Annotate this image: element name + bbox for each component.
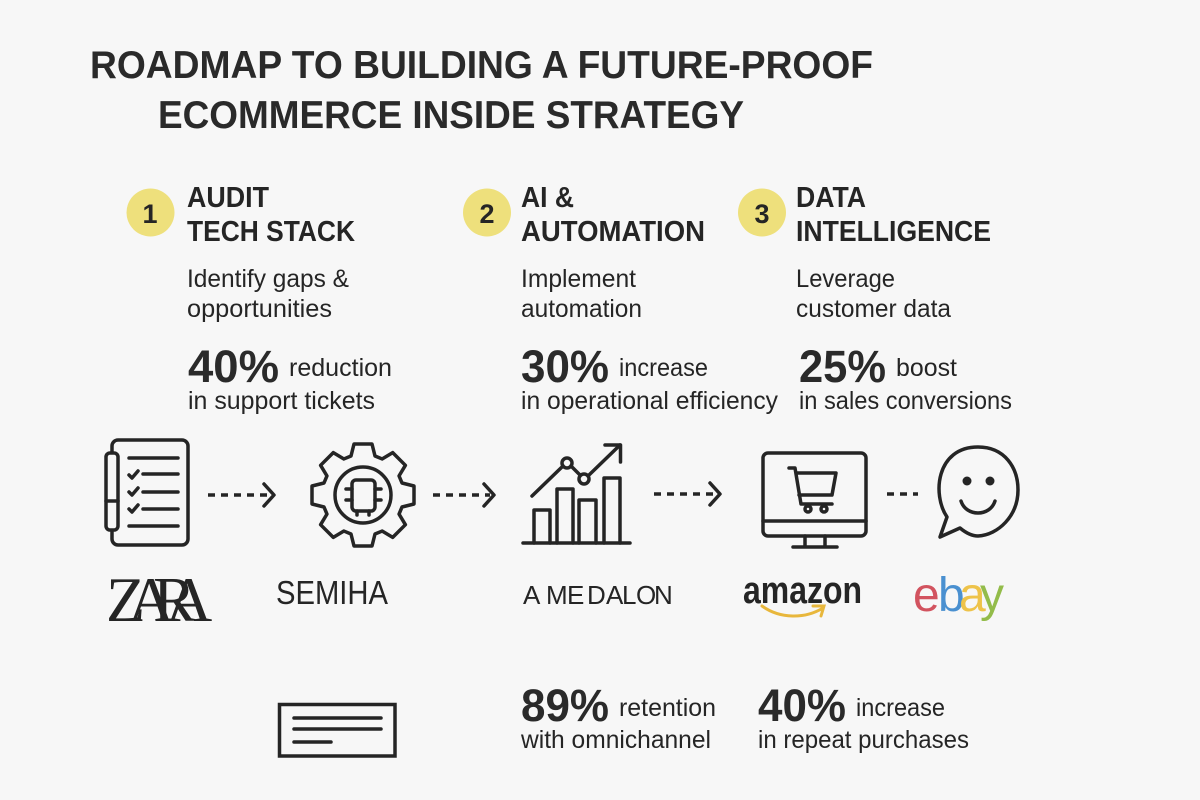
arrow: chart to monitor <box>654 483 720 505</box>
icon: text card <box>280 704 395 756</box>
icon: monitor with shopping cart <box>763 453 866 547</box>
logo: zara: ZARA <box>106 564 212 635</box>
logo: ebay: e <box>913 569 940 622</box>
text: step 3 description <box>796 265 951 323</box>
stat: 40% reduction in support tickets: reduction <box>289 354 392 382</box>
stat: 40% reduction in support tickets <box>188 341 392 415</box>
badge: number 2: 2 <box>479 199 495 229</box>
stat: 40% increase in repeat purchases <box>758 680 969 754</box>
stat: 25% boost in sales conversions: boost <box>896 354 957 382</box>
stat: 40% increase in repeat purchases: 40% <box>758 680 846 731</box>
logo: amazon: amazon <box>743 570 862 612</box>
title: ROADMAP TO BUILDING A FUTURE-PROOF <box>90 44 873 87</box>
text: step 2 description <box>521 265 642 323</box>
heading: data intelligence <box>796 182 991 248</box>
heading: ai and automation <box>521 182 705 248</box>
stat: 89% retention with omnichannel: 89% <box>521 680 609 731</box>
heading: data intelligence: DATA <box>796 182 866 214</box>
logo: ebay: b <box>938 569 965 622</box>
stat: 25% boost in sales conversions: in sales conversions <box>799 387 1012 415</box>
stat: 89% retention with omnichannel: retention <box>619 694 716 722</box>
panel: step 3 data intelligence <box>738 182 1012 415</box>
icon: checklist clipboard <box>106 440 188 545</box>
badge: number 1 <box>126 188 174 236</box>
logo: ebay: a <box>959 569 986 622</box>
stat: 30% increase in operational efficiency <box>521 341 778 415</box>
logo: amedalon: AMEDALON <box>523 580 673 610</box>
text: step 1 description <box>187 265 349 323</box>
logo: semiha: SEMIHA <box>276 574 388 611</box>
badge: number 3 <box>738 188 786 236</box>
stat: 40% reduction in support tickets: in support tickets <box>188 387 375 415</box>
stat: 40% reduction in support tickets: 40% <box>188 341 279 392</box>
stat: 89% retention with omnichannel: with omnichannel <box>520 726 711 754</box>
stat: 25% boost in sales conversions <box>799 341 1012 415</box>
arrow: monitor to speech bubble <box>887 492 918 496</box>
text: step 1 description: opportunities <box>187 295 332 323</box>
stat: 25% boost in sales conversions: 25% <box>799 341 886 392</box>
heading: data intelligence: INTELLIGENCE <box>796 216 991 248</box>
badge: number 2 <box>463 188 511 236</box>
badge: number 3: 3 <box>754 199 770 229</box>
text: step 2 description: automation <box>521 295 642 323</box>
text: step 3 description: customer data <box>796 295 951 323</box>
icon: gear with chip <box>312 444 414 546</box>
heading: ai and automation: AUTOMATION <box>521 216 705 248</box>
stat: 89% retention with omnichannel <box>520 680 716 754</box>
stat: 40% increase in repeat purchases: increase <box>856 694 945 722</box>
heading: ai and automation: AI & <box>521 182 574 214</box>
stat: 30% increase in operational efficiency: increase <box>619 354 708 382</box>
text: step 1 description: Identify gaps & <box>187 265 349 293</box>
heading: audit tech stack: AUDIT <box>187 182 269 214</box>
logo: ebay: y <box>980 569 1004 622</box>
arrow: checklist to gear <box>208 484 274 506</box>
panel: step 1 audit tech stack <box>126 182 392 415</box>
text: step 3 description: Leverage <box>796 265 895 293</box>
badge: number 1: 1 <box>142 199 158 229</box>
stat: 30% increase in operational efficiency: 30% <box>521 341 609 392</box>
stat: 40% increase in repeat purchases: in repeat purchases <box>758 726 969 754</box>
icon: bar chart with trend line <box>523 445 630 543</box>
heading: audit tech stack <box>187 182 355 248</box>
text: step 2 description: Implement <box>521 265 636 293</box>
title: ECOMMERCE INSIDE STRATEGY <box>158 94 744 137</box>
stat: 30% increase in operational efficiency: in operational efficiency <box>521 387 778 415</box>
arrow: gear to chart <box>433 484 494 506</box>
logo: ebay <box>913 569 1004 622</box>
icon: smiling speech bubble <box>939 447 1018 537</box>
panel: step 2 ai and automation <box>463 182 778 415</box>
heading: audit tech stack: TECH STACK <box>187 216 355 248</box>
title <box>90 44 873 137</box>
